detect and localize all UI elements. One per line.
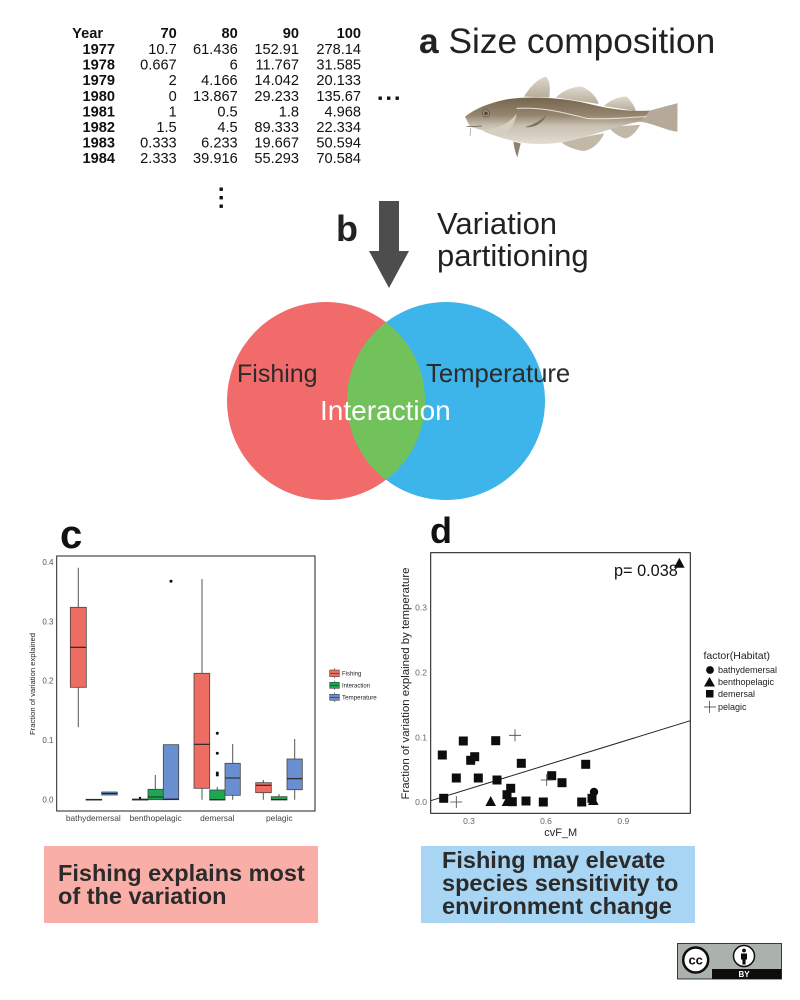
table column 70: 10.7 (148, 42, 177, 58)
x axis title: cvF_M (544, 827, 577, 839)
table column 70: 2.333 (140, 151, 177, 167)
y axis labels: 0.1 (42, 736, 54, 745)
table column 100: 22.334 (316, 120, 361, 136)
table column 70: 0.667 (140, 58, 177, 74)
legend (704, 650, 777, 713)
y axis labels: 0.3 (42, 617, 54, 626)
table column 80: 61.436 (193, 42, 238, 58)
table year column: 1977 (83, 42, 115, 58)
label: c: c (60, 513, 82, 557)
table column 80: 4.5 (217, 120, 238, 136)
y axis title: Fraction of variation explained (28, 633, 37, 735)
legend title: factor(Habitat) (704, 650, 770, 662)
legend key: temperature: Temperature (342, 694, 377, 702)
badge: creative commons BY: cc (688, 952, 703, 968)
label: d: d (430, 510, 452, 551)
table column 90: 11.767 (255, 58, 299, 74)
x axis labels: 0.3 (463, 816, 475, 826)
table column 70: 1.5 (156, 120, 177, 136)
table year column: 1984 (83, 151, 116, 167)
legend key: interaction: Interaction (342, 684, 370, 690)
median lines (70, 647, 302, 800)
table column 100: 4.968 (324, 104, 361, 120)
table column 100: 20.133 (316, 73, 361, 89)
outliers (139, 580, 219, 799)
legend item: bathydemersal: bathydemersal (718, 665, 777, 675)
table header row: 100 (337, 26, 361, 42)
table year column: 1981 (83, 104, 115, 120)
label: Fishing: Fishing (237, 360, 318, 388)
callout: fishing may elevate: environment change (442, 893, 672, 919)
table column 80 (193, 42, 238, 167)
label: Interaction: Interaction (320, 395, 451, 426)
y axis labels: 0.1 (415, 732, 427, 742)
y axis labels: 0.2 (42, 677, 54, 686)
x axis labels: bathydemersal (66, 813, 121, 823)
table year column: 1980 (83, 89, 115, 105)
table year column: 1982 (83, 120, 115, 136)
venn diagram (227, 302, 570, 500)
horizontal ellipsis (378, 96, 399, 100)
y axis labels (415, 602, 427, 807)
legend item: demersal: demersal (718, 689, 755, 699)
table year column: 1983 (83, 136, 115, 152)
x axis labels: 0.6 (540, 816, 552, 826)
box plot: fraction of variation explained (28, 556, 377, 823)
table column 80: 39.916 (193, 151, 238, 167)
callout: fishing may elevate: species sensitivity to (442, 870, 678, 896)
heading: a Size composition: a Size composition (419, 22, 715, 61)
points: benthopelagic triangles (485, 558, 685, 806)
badge: creative commons BY (678, 944, 782, 979)
table header row: 70 (160, 26, 177, 42)
scatter plot: temperature vs cvF_M (400, 553, 777, 839)
regression line (431, 721, 690, 801)
table column 70: 1 (169, 104, 177, 120)
points: demersal squares (438, 736, 596, 806)
table column 90: 89.333 (254, 120, 299, 136)
x axis labels: benthopelagic (130, 813, 182, 823)
legend key: fishing: Fishing (342, 672, 361, 678)
table header row (72, 26, 361, 42)
y axis labels: 0.0 (415, 797, 427, 807)
plot frame (57, 556, 315, 811)
label: b: b (336, 208, 358, 249)
plot frame (431, 553, 690, 813)
table column 80: 6.233 (201, 136, 238, 152)
y axis labels: 0.4 (42, 558, 54, 567)
table column 90: 1.8 (279, 104, 299, 120)
table column 100: 50.594 (316, 136, 361, 152)
circle: fishing (227, 302, 425, 500)
y axis labels: 0.0 (42, 796, 54, 804)
table column 90: 14.042 (254, 73, 299, 89)
table column 70: 0.333 (140, 136, 177, 152)
x axis labels (66, 813, 293, 823)
table column 100: 135.67 (316, 89, 361, 105)
whiskers (78, 568, 295, 800)
y axis labels: 0.2 (415, 667, 427, 677)
x axis labels (463, 816, 629, 826)
table column 90: 29.233 (254, 89, 299, 105)
table column 80: 6 (230, 58, 238, 74)
boxes: interaction (86, 789, 287, 800)
icon: cod fish (465, 77, 677, 157)
x axis labels: pelagic (266, 813, 293, 823)
label: Temperature: Temperature (426, 360, 570, 388)
table column 90 (254, 42, 299, 167)
table column 100 (316, 42, 361, 167)
table column 100: 278.14 (316, 42, 361, 58)
x axis labels: demersal (200, 813, 235, 823)
callout: fishing explains most: Fishing explains most (58, 860, 305, 886)
badge: creative commons BY: BY (738, 970, 750, 979)
table year column: 1979 (83, 73, 115, 89)
heading: Variation partitioning: Variation (437, 206, 557, 241)
annotation: p value: p= 0.038 (614, 562, 678, 580)
table year column (83, 42, 116, 167)
legend item: benthopelagic: benthopelagic (718, 677, 775, 687)
arrow: down (369, 201, 409, 288)
callout: fishing may elevate: Fishing may elevate (442, 847, 665, 873)
legend item: pelagic: pelagic (718, 702, 747, 712)
x axis labels: 0.9 (617, 816, 629, 826)
table column 90: 152.91 (254, 42, 299, 58)
table header row: Year (72, 26, 103, 42)
callout: fishing explains most: of the variation (58, 883, 226, 909)
table year column: 1978 (83, 58, 115, 74)
table column 70: 2 (169, 73, 177, 89)
y axis title: Fraction of variation explained by temperature (400, 568, 412, 800)
table column 100: 31.585 (316, 58, 361, 74)
boxes: fishing (70, 607, 271, 800)
table header row: 80 (221, 26, 238, 42)
table column 90: 19.667 (254, 136, 299, 152)
overlap: interaction (347, 322, 425, 480)
vertical ellipsis (220, 188, 223, 208)
boxes: temperature (102, 745, 302, 800)
heading: Variation partitioning: partitioning (437, 238, 589, 273)
points: pelagic plus marks (450, 729, 553, 808)
circle: temperature (347, 302, 545, 500)
table column 80: 13.867 (193, 89, 238, 105)
table column 100: 70.584 (316, 151, 361, 167)
table column 70: 0 (169, 89, 177, 105)
table column 80: 4.166 (201, 73, 238, 89)
callout: fishing explains most (44, 846, 318, 923)
callout: fishing may elevate (421, 846, 695, 923)
table column 90: 55.293 (254, 151, 299, 167)
points: bathydemersal circles (588, 788, 598, 802)
table header row: 90 (283, 26, 299, 42)
legend (330, 668, 377, 702)
table column 80: 0.5 (217, 104, 238, 120)
y axis labels: 0.3 (415, 602, 427, 612)
table column 70 (140, 42, 177, 167)
panel: data table (72, 26, 399, 208)
y axis labels (42, 558, 54, 804)
